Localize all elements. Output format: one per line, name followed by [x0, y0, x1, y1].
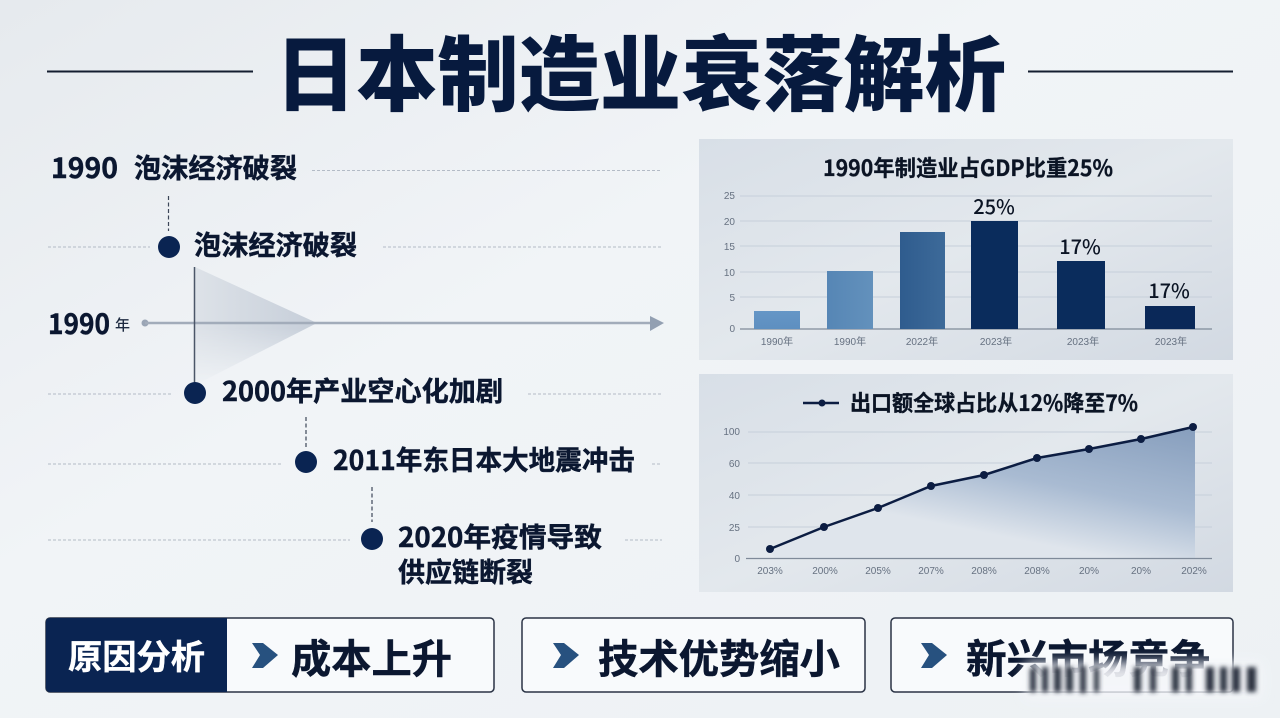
line chart axes: 60 [729, 459, 740, 470]
milestone: 2020: 供应链断裂 [398, 551, 533, 590]
milestone: 2011 [48, 417, 662, 478]
milestone: 2000 [48, 370, 662, 409]
timeline axis arrow: 年 [115, 314, 130, 335]
line chart axes: 25 [729, 523, 740, 534]
area under line [770, 427, 1195, 558]
cause box: cost: 原因分析 [68, 630, 205, 679]
bar chart axes: 25 [724, 191, 735, 202]
bar chart axes: 2023年 [1067, 335, 1099, 348]
panel: bar chart [699, 139, 1233, 360]
bar chart axes: 2022年 [906, 335, 938, 348]
line chart axes: 207% [918, 566, 944, 577]
line chart axes: 100 [723, 427, 740, 438]
bar value labels [973, 191, 1190, 304]
bar chart heading: 1990年制造业占GDP比重25% [823, 151, 1113, 183]
timeline heading: 1990 bubble burst: 1990 [51, 147, 118, 187]
bars [754, 221, 1195, 329]
line chart axes: 208% [1024, 566, 1050, 577]
line chart axes: 200% [812, 566, 838, 577]
bar value labels: 17% [1148, 275, 1190, 304]
bar chart axes: 2023年 [1155, 335, 1187, 348]
cause box: emerging markets [891, 618, 1233, 692]
cause box: cost: 成本上升 [291, 627, 452, 685]
milestone: bubble burst [48, 224, 662, 263]
baseline [746, 558, 1212, 560]
line chart axes: 205% [865, 566, 891, 577]
line chart axes: 208% [971, 566, 997, 577]
timeline axis arrow: 1990 [48, 303, 110, 343]
bar chart axes: 1990年 [834, 335, 866, 348]
bar chart axes [724, 191, 1212, 348]
bar chart axes: 0 [729, 324, 735, 335]
bar chart axes: 10 [724, 268, 735, 279]
timeline heading: 1990 bubble burst: 泡沫经济破裂 [134, 147, 297, 186]
milestone: 2000: 2000年产业空心化加剧 [222, 370, 503, 409]
bar chart axes: 2023年 [980, 335, 1012, 348]
cause box: technology: 技术优势缩小 [598, 627, 840, 685]
line chart axes: 40 [729, 491, 740, 502]
bar chart axes: 15 [724, 242, 735, 253]
line chart axes: 202% [1181, 566, 1207, 577]
timeline heading: 1990 bubble burst [51, 147, 662, 231]
cause box: emerging markets: 新兴市场竞争 [966, 627, 1210, 685]
title: 日本制造业衰落解析 [275, 9, 1006, 128]
timeline axis arrow [48, 267, 664, 385]
bar value labels: 17% [1059, 231, 1101, 260]
line chart heading with legend: 出口额全球占比从12%降至7% [850, 386, 1138, 418]
blurred watermark [1026, 662, 1262, 698]
bar chart axes: 20 [724, 217, 735, 228]
line chart axes [723, 427, 1212, 577]
milestone: 2011: 2011年东日本大地震冲击 [333, 439, 635, 478]
bar chart axes: 1990年 [761, 335, 793, 348]
bar value labels: 25% [973, 191, 1015, 220]
bar chart axes: 5 [729, 293, 735, 304]
line chart axes: 0 [734, 554, 740, 565]
line chart axes: 20% [1079, 566, 1099, 577]
cause box: cost [46, 618, 494, 692]
panel: line chart [699, 374, 1233, 592]
milestone: 2020: 2020年疫情导致 [398, 516, 602, 555]
panel: timeline [48, 147, 664, 590]
milestone: 2020 [48, 487, 662, 590]
line chart axes: 203% [757, 566, 783, 577]
line chart axes: 20% [1131, 566, 1151, 577]
line series [766, 423, 1197, 553]
panel: cause analysis [46, 618, 1233, 692]
milestone: bubble burst: 泡沫经济破裂 [194, 224, 357, 263]
cause box: technology [522, 618, 865, 692]
